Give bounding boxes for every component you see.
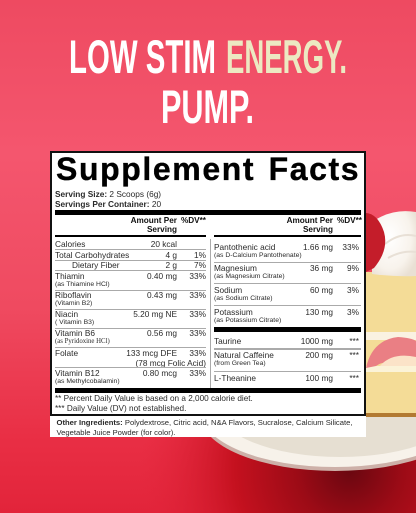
right column: minerals and actives: *** [349,350,359,360]
left column: nutrients: 2 g [165,260,177,270]
right column: minerals and actives: (from Green Tea) [214,360,266,367]
left column: nutrients: Folate [55,348,78,358]
left column: nutrients: 20 kcal [151,239,177,249]
left column: nutrients: 0.80 mcg [143,368,177,378]
left column: nutrients: 33% [189,290,206,300]
left column: nutrients: 33% [189,348,206,358]
right column: minerals and actives: 3% [347,285,359,295]
footnotes [55,394,253,412]
column headers: %DV** [337,216,362,225]
left column: nutrients: (Vitamin B2) [55,300,92,307]
right column: minerals and actives: 1.66 mg [303,242,333,252]
headline: LOW STIM [69,30,216,83]
left column: nutrients: Vitamin B12 [55,368,100,378]
right column: minerals and actives: Sodium [214,285,242,295]
serving information: Servings Per Container: 20 [55,199,161,209]
left column: nutrients: 0.40 mg [147,271,177,281]
other ingredients: Vegetable Juice Powder (for color). [56,428,175,436]
column headers: Amount Per [131,216,177,225]
left column: nutrients: 5.20 mg NE [133,309,177,319]
right column: minerals and actives: Pantothenic acid [214,242,275,252]
left column: nutrients: 0.43 mg [147,290,177,300]
right column: minerals and actives: 9% [347,263,359,273]
serving information: Serving Size: 2 Scoops (6g) [55,189,161,199]
left column: nutrients [55,239,206,385]
heading: Supplement Facts: Supplement Facts [56,151,360,187]
left column: nutrients: (as Methylcobalamin) [55,378,120,385]
left column: nutrients: Thiamin [55,271,85,281]
left column: nutrients: Total Carbohydrates [55,250,129,260]
left column: nutrients: 7% [194,260,206,270]
right column: minerals and actives: *** [349,373,359,383]
column headers: Serving [303,225,333,234]
right column: minerals and actives: 100 mg [305,373,333,383]
other ingredients [56,418,352,436]
left column: nutrients: 33% [189,271,206,281]
left column: nutrients: Niacin [55,309,78,319]
right column: minerals and actives: 200 mg [305,350,333,360]
right column: minerals and actives [214,242,361,383]
headline: PUMP. [161,80,254,133]
left column: nutrients: ( Vitamin B3) [55,319,94,326]
left column: nutrients: 133 mcg DFE [126,348,177,358]
right column: minerals and actives: *** [349,336,359,346]
footnotes: *** Daily Value (DV) not established. [55,404,186,412]
column headers: %DV** [181,216,206,225]
right column: minerals and actives: (as D-Calcium Pantothenate) [214,252,302,259]
column headers: Serving [147,225,177,234]
right column: minerals and actives: 60 mg [310,285,333,295]
right column: minerals and actives: Magnesium [214,263,257,273]
column headers: Amount Per [287,216,333,225]
right column: minerals and actives: 33% [342,242,359,252]
left column: nutrients: Riboflavin [55,290,91,300]
serving information [55,189,161,209]
right column: minerals and actives: (as Potassium Citrate) [214,317,281,324]
left column: nutrients: 33% [189,328,206,338]
right column: minerals and actives: 1000 mg [301,336,333,346]
headline [69,30,347,133]
left column: nutrients: 33% [189,368,206,378]
left column: nutrients: (as Pyridoxine HCl) [55,338,110,345]
left column: nutrients: 0.56 mg [147,328,177,338]
left column: nutrients: 4 g [165,250,177,260]
other ingredients: Other Ingredients: Polydextrose, Citric acid, N&A Flavors, Sucralose, Calcium Silicate, [56,418,352,427]
left column: nutrients: Calories [55,239,85,249]
right column: minerals and actives: Taurine [214,336,241,346]
left column: nutrients: 1% [194,250,206,260]
right column: minerals and actives: Natural Caffeine [214,350,274,360]
left column: nutrients: Vitamin B6 [55,328,95,338]
left column: nutrients: 33% [189,309,206,319]
left column: nutrients: (78 mcg Folic Acid) [135,358,206,368]
column headers [130,216,362,234]
right column: minerals and actives: L-Theanine [214,373,256,383]
panel: supplement facts label [50,151,366,437]
left column: nutrients: Dietary Fiber [72,260,120,270]
right column: minerals and actives: (as Sodium Citrate) [214,295,273,302]
right column: minerals and actives: 3% [347,307,359,317]
left column: nutrients: (as Thiamine HCl) [55,281,110,288]
right column: minerals and actives: 36 mg [310,263,333,273]
footnotes: ** Percent Daily Value is based on a 2,000 calorie diet. [55,394,253,403]
right column: minerals and actives: 130 mg [305,307,333,317]
right column: minerals and actives: Potassium [214,307,253,317]
right column: minerals and actives: (as Magnesium Citrate) [214,273,285,280]
